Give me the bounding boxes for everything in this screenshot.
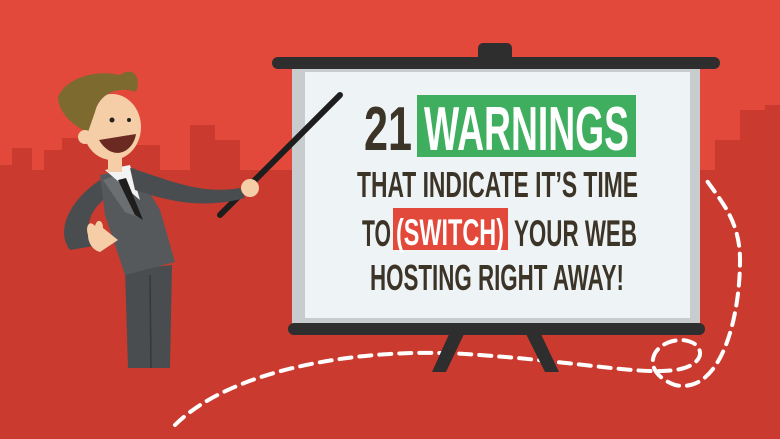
red box: switch: [393, 208, 508, 250]
top bar: [272, 57, 720, 69]
jacket: [100, 168, 175, 275]
neck & head: [108, 150, 122, 172]
title text: (SWITCH): [396, 212, 504, 253]
hands: [241, 179, 259, 197]
pointing arm: [130, 168, 245, 203]
green box: warnings: [417, 95, 636, 157]
legs: [125, 265, 172, 368]
mouth: [99, 134, 136, 153]
projector screen: [272, 43, 720, 372]
back arm: [64, 180, 110, 250]
legs: [432, 332, 559, 372]
shirt & tie: [105, 165, 140, 200]
dashed path: [175, 178, 740, 425]
title text: TO: [362, 213, 391, 254]
man: [58, 72, 259, 368]
eye: [110, 118, 114, 122]
skyline: [0, 105, 780, 439]
ear: [78, 130, 92, 144]
frame: [292, 64, 700, 326]
title text: 21: [364, 95, 412, 164]
title text: HOSTING RIGHT AWAY!: [370, 257, 624, 298]
title text: [357, 95, 638, 298]
hair: [58, 72, 138, 132]
pointer stick: [220, 95, 340, 215]
title text: YOUR WEB: [514, 213, 637, 254]
knob: [478, 43, 512, 63]
bottom bar: [288, 323, 705, 335]
title text: WARNINGS: [424, 95, 629, 164]
lapel: [103, 175, 140, 218]
